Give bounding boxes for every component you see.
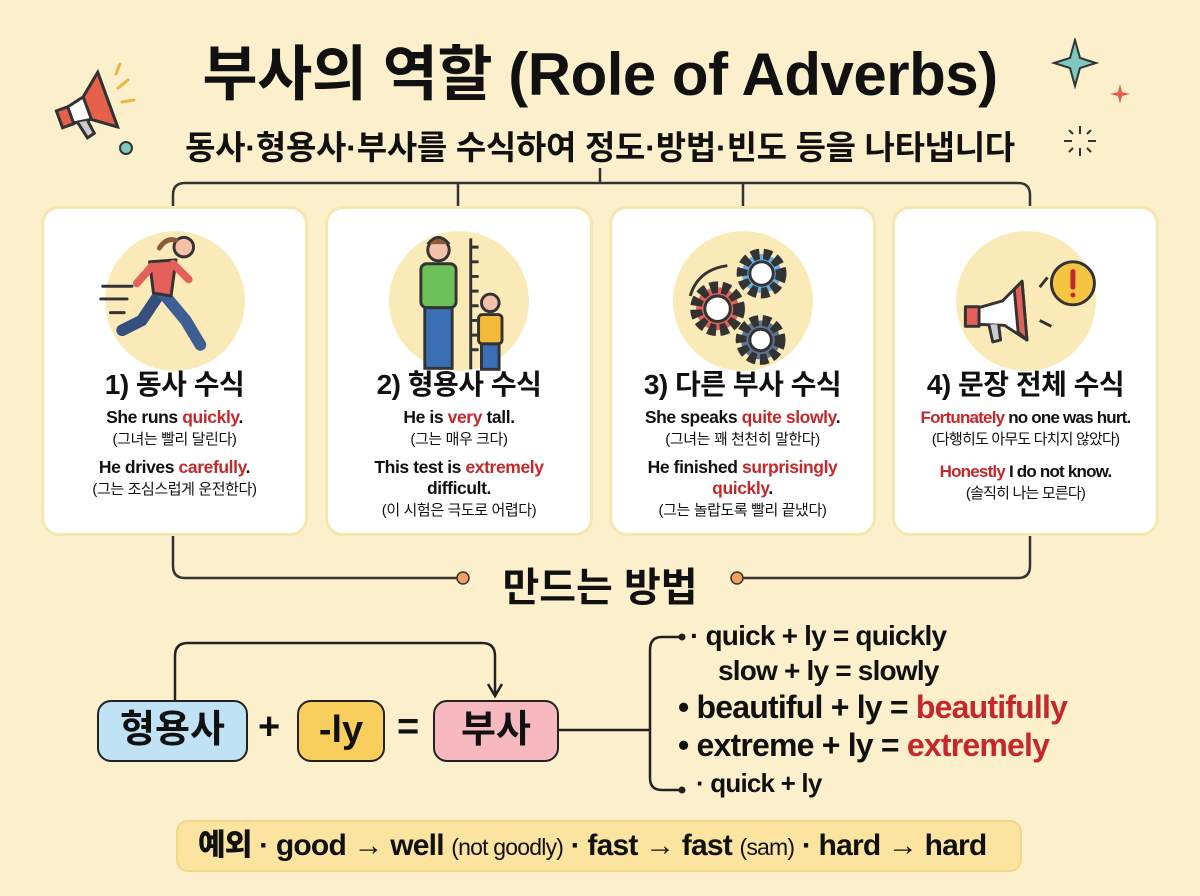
- box: adverb: 부사: [461, 709, 531, 751]
- example list: · quick + ly = quickly: [690, 620, 946, 651]
- subtitle: 동사·형용사·부사를 수식하여 정도·방법·빈도 등을 나타냅니다: [185, 129, 1015, 166]
- panel: verb: [41, 206, 308, 536]
- icon: megaphone decoration: [54, 62, 136, 155]
- heading: 1) 동사 수식: [105, 369, 244, 400]
- examples: (그는 놀랍도록 빨리 끝냈다): [659, 502, 826, 519]
- exceptions bar: 예외 · good → well (not goodly) · fast → fast (sam) · hard → hard: [198, 829, 986, 862]
- heading: 4) 문장 전체 수식: [927, 369, 1124, 400]
- examples: She runs quickly.: [106, 407, 243, 427]
- examples: (이 시험은 극도로 어렵다): [382, 502, 536, 519]
- examples: He is very tall.: [403, 407, 515, 427]
- title: 부사의 역할 (Role of Adverbs): [202, 41, 998, 108]
- examples: (그녀는 꽤 천천히 말한다) He finished surprisingly: [648, 431, 837, 477]
- heading: 3) 다른 부사 수식: [644, 369, 841, 400]
- example list: slow + ly = slowly: [718, 655, 939, 686]
- icon: runner: [99, 236, 206, 351]
- plus sign: +: [258, 706, 280, 748]
- examples: She speaks quite slowly.: [645, 407, 840, 427]
- box: adjective: [97, 700, 248, 762]
- box: -ly: [297, 700, 385, 762]
- equals sign: =: [397, 706, 419, 748]
- example list: • extreme + ly = extremely: [678, 727, 1049, 763]
- icon: sparkles: [1050, 38, 1130, 156]
- examples: [374, 407, 544, 519]
- heading: 2) 형용사 수식: [377, 369, 541, 400]
- examples: (솔직히 나는 모른다): [966, 485, 1085, 502]
- examples: quickly.: [712, 478, 773, 498]
- examples: Fortunately no one was hurt.: [921, 408, 1130, 427]
- icon: tall and short person: [419, 236, 504, 371]
- examples: (그는 매우 크다) This test is extremely: [374, 431, 544, 477]
- example list: · quick + ly: [696, 768, 822, 798]
- box: -ly: -ly: [319, 709, 363, 751]
- examples: (다행히도 아무도 다치지 않았다) Honestly I do not know.: [932, 431, 1119, 481]
- panel: adjective: [325, 206, 593, 536]
- heading: how to make: 만드는 방법: [502, 566, 698, 610]
- panel: sentence: [892, 206, 1159, 536]
- exceptions bar: [176, 820, 1022, 872]
- icon: megaphone with exclamation: [964, 260, 1096, 344]
- example list: • beautiful + ly = beautifully: [678, 689, 1067, 725]
- examples: [921, 408, 1130, 502]
- examples: difficult.: [427, 478, 491, 498]
- box: adverb: [433, 700, 559, 762]
- examples: (그는 조심스럽게 운전한다): [92, 481, 257, 498]
- example list: [678, 620, 1068, 798]
- icon: gears: [688, 248, 786, 365]
- panel: other adverb: [609, 206, 876, 536]
- examples: (그녀는 빨리 달린다) He drives carefully.: [99, 431, 250, 477]
- examples: [645, 407, 840, 519]
- box: adjective: 형용사: [120, 709, 225, 751]
- examples: [92, 407, 257, 498]
